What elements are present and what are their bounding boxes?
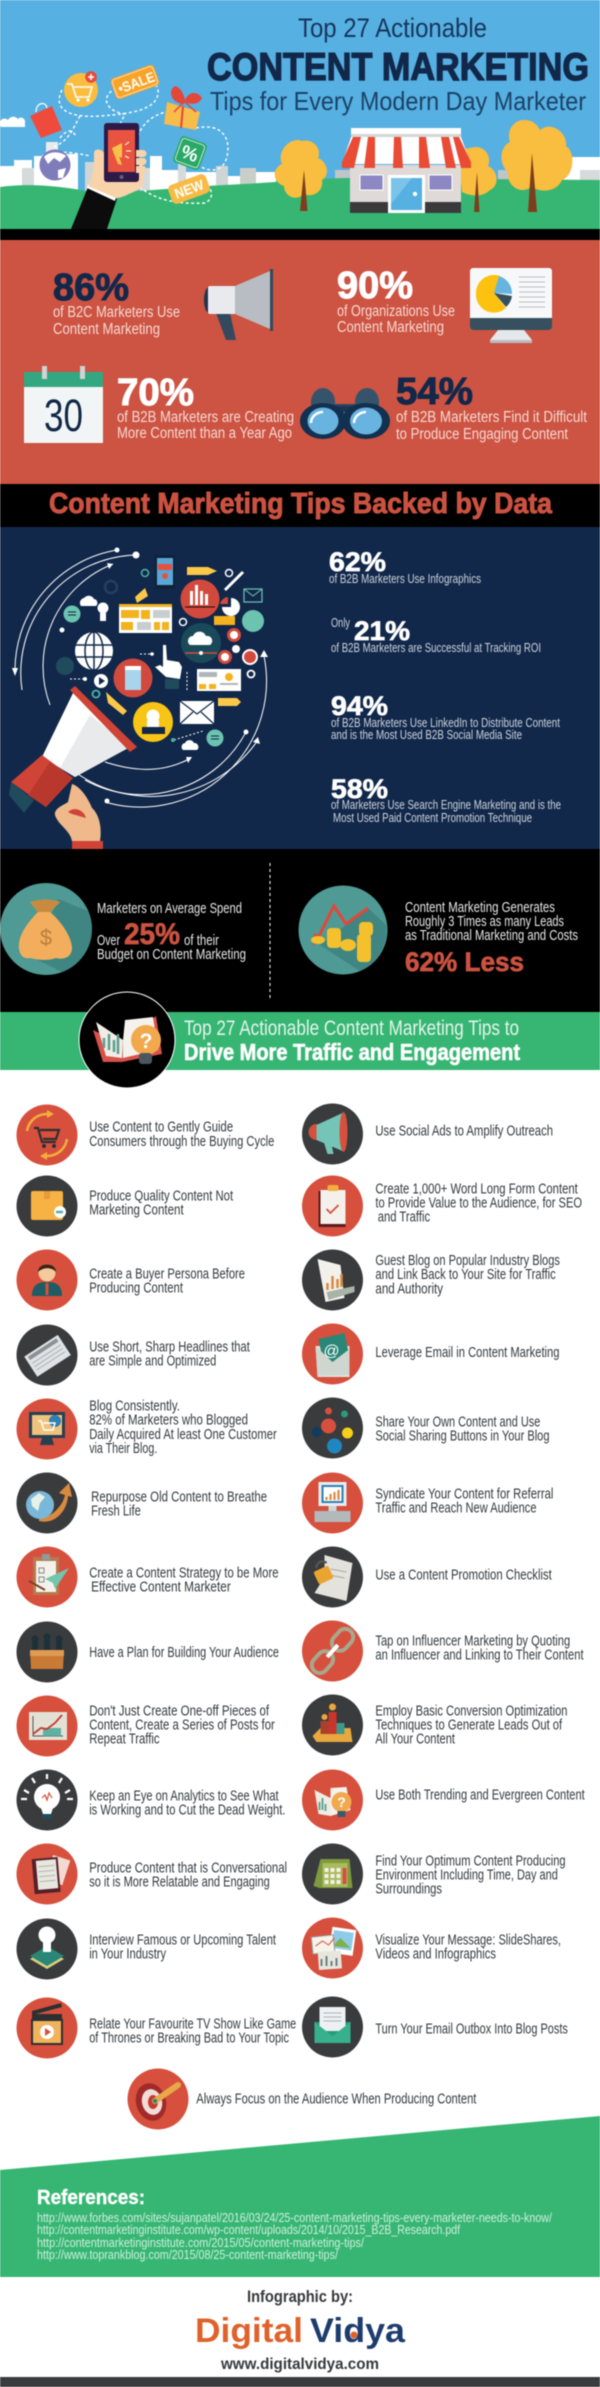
- icon: desk calendar: [302, 1844, 363, 1904]
- stat: 70%: of B2B Marketers are Creating: [117, 409, 294, 426]
- icon: bulb on book: [16, 1918, 78, 1980]
- icon: globe with arrow: [16, 1472, 78, 1534]
- logo: Digital Vidya: Vidya: [310, 2312, 406, 2350]
- icon: calendar: 30: [44, 390, 83, 441]
- icon: coins and falling arrow: [298, 886, 388, 974]
- tip: analytics: [16, 1770, 286, 1830]
- icon: globe: [40, 150, 70, 180]
- icon: new tag: NEW: [172, 176, 207, 202]
- stat: 58%: 58%: [331, 774, 388, 804]
- stat: 21%: of B2B Marketers are Successful at Tracking ROI: [331, 641, 541, 655]
- tip: optimum environment: Surroundings: [375, 1881, 442, 1897]
- icon: tree left: [275, 140, 327, 211]
- stat: 90%: of Organizations Use: [337, 303, 455, 320]
- tip: plan audience: Have a Plan for Building Your Audience: [89, 1645, 279, 1661]
- tip: conversion optimization: [302, 1694, 568, 1756]
- tip: focus on audience: [128, 2068, 476, 2130]
- panel: data tips: [0, 527, 600, 850]
- black divider band: [0, 229, 600, 240]
- tip: repurpose content: Repurpose Old Content to Breathe: [91, 1490, 267, 1506]
- stat: 90%: Content Marketing: [337, 319, 444, 336]
- logo: Digital Vidya: [195, 2312, 406, 2350]
- tip: visualize message: [302, 1918, 561, 1978]
- tip: tv show: [16, 1998, 296, 2058]
- tip: tv show: of Thrones or Breaking Bad to Your Topic: [89, 2031, 289, 2047]
- tip: promotion checklist: [302, 1546, 552, 1608]
- tip: blog consistently: via Their Blog.: [89, 1441, 157, 1457]
- cloud circle: [181, 623, 221, 663]
- tip: conversational: so it is More Relatable and Engaging: [89, 1875, 270, 1891]
- ground: [0, 178, 600, 229]
- tip: interview talent: Interview Famous or Upcoming Talent: [89, 1932, 276, 1948]
- megaphone body: [11, 755, 73, 807]
- icon: open envelope with letter: [302, 1996, 363, 2058]
- tip: conversational: [16, 1844, 287, 1904]
- icon: money bag: [0, 883, 92, 975]
- tip: short headlines: are Simple and Optimized: [89, 1354, 216, 1370]
- globe: [75, 632, 113, 670]
- tip: plan audience: [16, 1622, 279, 1682]
- tip: syndicate content: Traffic and Reach New Audience: [375, 1501, 536, 1517]
- tip: visualize message: Videos and Infographics: [375, 1946, 496, 1962]
- icon: podium: [302, 1694, 363, 1756]
- cloud: [0, 117, 25, 127]
- stat: 70%: 70%: [117, 372, 194, 414]
- icon: parcel box: [16, 1176, 78, 1236]
- title: Top 27 Actionable: [298, 13, 487, 43]
- scattered teal and white icons: [226, 570, 232, 576]
- stat: 90%: 90%: [337, 265, 413, 307]
- banner: top 27 tips heading: Drive More Traffic and Engagement: [184, 1039, 520, 1065]
- text: spend stat: 25%: [124, 918, 180, 951]
- icon: new tag: [167, 173, 211, 205]
- tip: buyer persona: Create a Buyer Persona Before: [89, 1266, 245, 1282]
- tip: social ads: [302, 1104, 553, 1164]
- tip: series of posts: [16, 1696, 275, 1756]
- icon: book with question bulb: [302, 1770, 363, 1830]
- tip: tv show: Relate Your Favourite TV Show Like Game: [89, 2017, 296, 2033]
- tip: email to blog: [302, 1996, 568, 2058]
- tip: interview talent: in Your Industry: [89, 1946, 167, 1962]
- icon: desktop computer: [302, 1472, 363, 1534]
- pencils: [106, 692, 127, 715]
- stat: 54%: [396, 371, 588, 443]
- tip: guest blog: and Authority: [375, 1281, 444, 1297]
- icon: gift box: [164, 86, 202, 130]
- icon: email envelope: @: [323, 1343, 340, 1360]
- text: spend stat: Budget on Content Marketing: [97, 947, 246, 963]
- tip: interview talent: [16, 1918, 276, 1980]
- tip: series of posts: Content, Create a Series of Posts for: [89, 1718, 275, 1734]
- text: leads stat: Content Marketing Generates: [405, 900, 555, 916]
- stat: 70%: [117, 372, 294, 442]
- icon: social dots: [302, 1398, 363, 1458]
- tip: leverage email: [302, 1324, 560, 1384]
- stat: 62%: of B2B Marketers Use Infographics: [329, 572, 481, 586]
- tip: guest blog: [302, 1250, 560, 1310]
- tip: analytics: is Working and to Cut the Dead Weight.: [89, 1802, 286, 1818]
- tip: content strategy: Create a Content Strategy to be More: [89, 1565, 279, 1581]
- tip: series of posts: Repeat Traffic: [89, 1732, 160, 1748]
- stat: 21%: 21%: [354, 616, 410, 646]
- tip: buyer persona: [16, 1250, 245, 1310]
- megaphone cone: [42, 693, 130, 777]
- stat: 86%: of B2C Marketers Use: [53, 304, 180, 321]
- illustration: megaphone with content icons: [9, 548, 268, 850]
- icon: book and question bulb: ?: [140, 1030, 152, 1053]
- icon: calendar: [24, 366, 103, 443]
- icon: business person: [16, 1250, 78, 1310]
- icon: line chart board: [16, 1696, 78, 1756]
- page card: [197, 669, 241, 691]
- icon: clipboard and paper plane: [16, 1546, 78, 1608]
- footer bar: [0, 2377, 600, 2387]
- dashed connectors: [38, 82, 228, 203]
- skyline: [0, 142, 600, 196]
- envelope: [180, 701, 214, 724]
- tip: blog consistently: Blog Consistently.: [89, 1399, 180, 1415]
- icon: teal megaphone: [302, 1104, 363, 1164]
- stat: 94%: [331, 691, 560, 742]
- tip: optimum environment: [302, 1844, 566, 1904]
- icon: tree right: [501, 120, 572, 212]
- tip: syndicate content: [302, 1472, 553, 1534]
- tip: promotion checklist: Use a Content Promotion Checklist: [375, 1568, 552, 1584]
- tip: blog consistently: [16, 1398, 277, 1460]
- stat: 54%: to Produce Engaging Content: [396, 426, 569, 443]
- pointer hand: [155, 645, 182, 679]
- title: [207, 13, 589, 116]
- heading: tips backed by data: Content Marketing Tips Backed by Data: [49, 488, 553, 520]
- stat: 21%: [331, 616, 541, 655]
- panel: spend and leads: [0, 849, 600, 1012]
- icon: email envelope: [302, 1324, 363, 1384]
- icon: light bulb: [16, 1770, 78, 1830]
- stat: 94%: and is the Most Used B2B Social Media Site: [331, 728, 522, 742]
- icon: hand with phone: [71, 123, 146, 229]
- tip: quality content: Produce Quality Content Not: [89, 1189, 233, 1205]
- panel: references: [0, 2116, 600, 2277]
- tip: blog consistently: 82% of Marketers who Blogged: [89, 1413, 248, 1429]
- icon: red shopping bag: [30, 103, 62, 138]
- stat: 62%: 62%: [329, 547, 386, 577]
- stat: 86%: [53, 267, 180, 338]
- tip: analytics: Keep an Eye on Analytics to See What: [89, 1788, 279, 1804]
- panel: header hero: [0, 0, 600, 229]
- icon: photos and charts: [302, 1918, 363, 1978]
- stat: 90%: [337, 265, 455, 336]
- tip: social ads: Use Social Ads to Amplify Outreach: [375, 1124, 553, 1140]
- stat: 62%: [329, 547, 481, 586]
- orbit arcs: [15, 550, 267, 807]
- stat: 86%: 86%: [53, 267, 129, 309]
- icon: store: [342, 128, 471, 213]
- text: spend stat: of their: [184, 933, 219, 949]
- stat: 70%: More Content than a Year Ago: [117, 425, 292, 442]
- stat: 58%: Most Used Paid Content Promotion Technique: [333, 811, 532, 825]
- person circle: [133, 702, 173, 742]
- stat: 54%: 54%: [396, 371, 473, 413]
- tip: repurpose content: Fresh Life: [91, 1504, 141, 1520]
- icon: scroll and lock: [302, 1546, 363, 1608]
- pie and markers: [222, 598, 240, 616]
- panel: references: http://www.toprankblog.com/2015/08/25-content-marketing-tips/: [37, 2248, 338, 2262]
- tip: guide consumers: [16, 1104, 274, 1166]
- tip: series of posts: Don't Just Create One-off Pieces of: [89, 1704, 270, 1720]
- text: spend stat: [97, 901, 246, 963]
- tip: syndicate content: Syndicate Your Content for Referral: [375, 1487, 553, 1503]
- panel: references: http://contentmarketinginstitute.com/wp-content/uploads/2014/10/2015_B2B_Research.pdf: [37, 2223, 460, 2237]
- icon: cart with arrows: [16, 1104, 78, 1166]
- icon: notebook: [16, 1844, 78, 1904]
- tip: trending and evergreen: [302, 1770, 585, 1830]
- icon: percent tile: %: [178, 142, 201, 167]
- tip: share content: [302, 1398, 550, 1458]
- tip: long form content: and Traffic: [378, 1210, 430, 1226]
- tip: conversational: Produce Content that is Conversational: [89, 1861, 287, 1877]
- text: spend stat: Marketers on Average Spend: [97, 901, 242, 917]
- text: leads stat: [405, 900, 578, 977]
- tip: share content: Share Your Own Content and Use: [375, 1414, 540, 1430]
- icon: tree behind store: [458, 147, 497, 212]
- icon: checklist clipboard: [302, 1176, 363, 1236]
- tip: short headlines: [5, 1313, 250, 1397]
- icon: shopping cart badge: [64, 71, 98, 107]
- credit: infographic by: Infographic by:: [247, 2287, 353, 2306]
- tip: repurpose content: [16, 1472, 267, 1534]
- icon: money bag: $: [40, 925, 52, 950]
- icon: monitor with pie chart: [470, 268, 552, 343]
- tip: blog consistently: Daily Acquired At least One Customer: [89, 1427, 277, 1443]
- tip: short headlines: Use Short, Sharp Headlines that: [89, 1340, 250, 1356]
- pencil: [187, 567, 217, 575]
- icon: megaphone: [204, 269, 273, 340]
- icon: monitor with cart: [16, 1398, 78, 1460]
- tip: share content: Social Sharing Buttons in Your Blog: [375, 1428, 550, 1444]
- logo: Digital Vidya: Digital: [195, 2312, 303, 2350]
- stat: 58%: [331, 774, 561, 825]
- icon: target and dart: [128, 2068, 188, 2130]
- bar chart circle: [180, 580, 220, 618]
- web page: [119, 604, 172, 633]
- icon: newspaper: [5, 1313, 89, 1397]
- credit: infographic by: [195, 2287, 406, 2373]
- text: spend stat: Over: [97, 933, 120, 949]
- stat: 21%: Only: [331, 616, 351, 630]
- tip: focus on audience: Always Focus on the Audience When Producing Content: [196, 2091, 476, 2107]
- icon: book and question bulb: [79, 992, 175, 1088]
- banner: top 27 tips heading: Top 27 Actionable Content Marketing Tips to: [184, 1017, 519, 1040]
- heading: tips backed by data: [0, 484, 600, 528]
- icon: chart scroll: [302, 1250, 363, 1310]
- text: leads stat: 62% Less: [405, 947, 524, 977]
- hand: [55, 784, 101, 841]
- icon: meeting table: [16, 1622, 78, 1682]
- panel: references: References:: [37, 2187, 145, 2209]
- tip: quality content: [16, 1176, 233, 1236]
- icon: clapperboard: [16, 1998, 78, 2058]
- icon: book with question bulb: ?: [337, 1794, 346, 1810]
- icon: sale tag: •SALE: [116, 69, 157, 97]
- tip: buyer persona: Producing Content: [89, 1280, 183, 1296]
- tip: guide consumers: Consumers through the Buying Cycle: [89, 1134, 274, 1150]
- play and gears: [94, 674, 108, 688]
- tip: influencer marketing: [289, 1608, 584, 1694]
- stat: 94%: 94%: [331, 691, 388, 721]
- icon: chain links: [289, 1608, 376, 1694]
- icon: percent tile: [172, 135, 208, 171]
- document circle: [114, 658, 152, 698]
- tip: long form content: [302, 1176, 582, 1236]
- phone: [155, 555, 175, 589]
- banner: top 27 tips heading: [0, 992, 600, 1088]
- credit: infographic by: www.digitalvidya.com: [220, 2356, 379, 2373]
- tip: content strategy: [16, 1546, 279, 1608]
- icon: binoculars: [300, 388, 390, 439]
- tip: quality content: Marketing Content: [89, 1203, 184, 1219]
- tip: conversion optimization: All Your Content: [375, 1732, 455, 1748]
- panel: references: http://contentmarketinginstitute.com/2015/05/content-marketing-tips/: [37, 2236, 364, 2250]
- stat: 86%: Content Marketing: [53, 321, 160, 338]
- tip: guide consumers: Use Content to Gently Guide: [89, 1120, 233, 1136]
- panel: headline statistics: [0, 240, 600, 484]
- tip: content strategy: Effective Content Marketer: [91, 1579, 231, 1595]
